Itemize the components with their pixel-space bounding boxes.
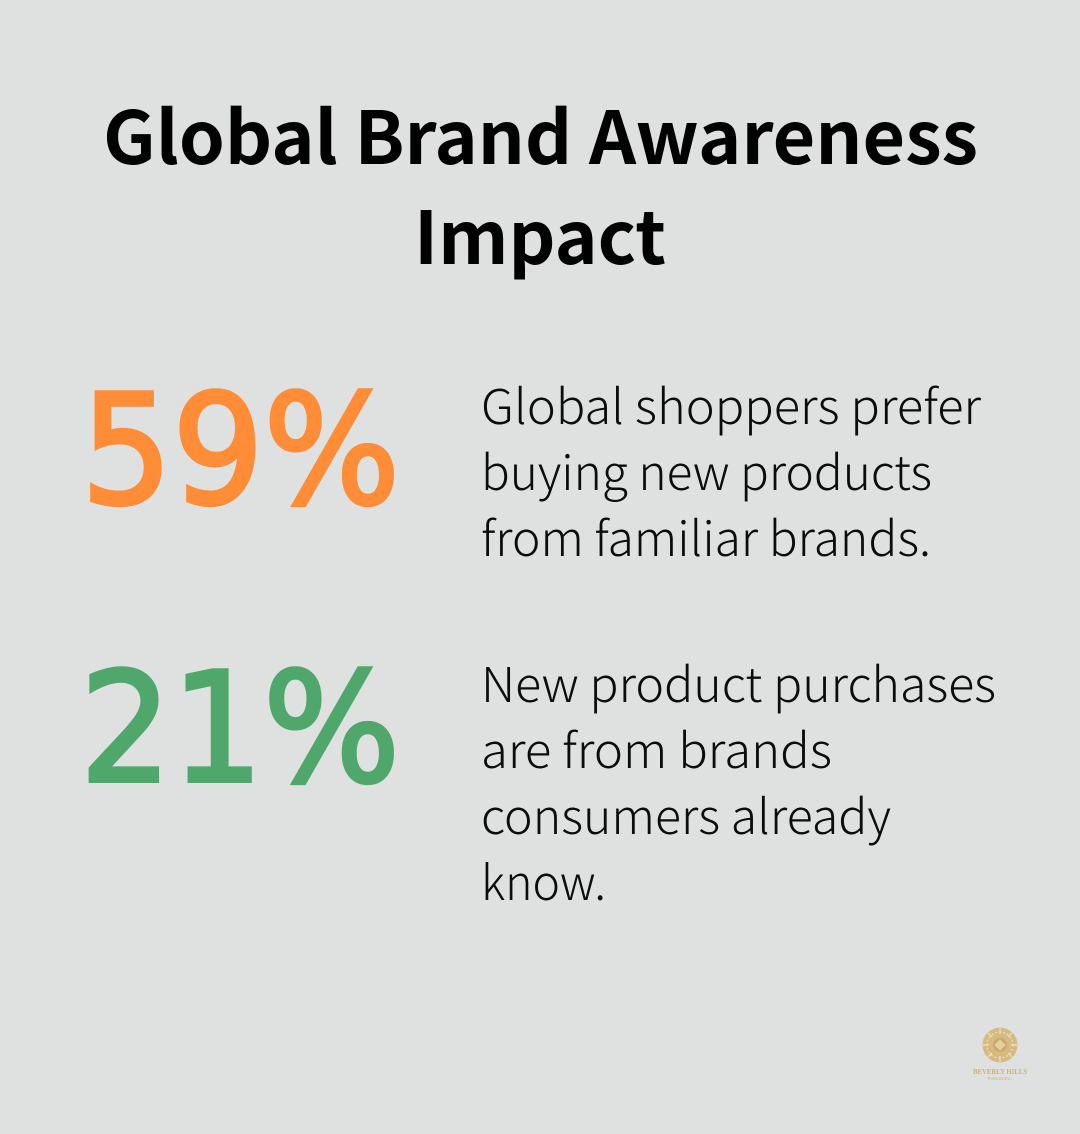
tagline: PUBLISHING	[988, 1076, 1013, 1081]
stat description: familiar brands	[481, 368, 982, 570]
stat value: 59%: 59%	[81, 362, 400, 539]
panel: stat 59%	[81, 362, 982, 570]
stat description: known brands: are from brands	[481, 712, 832, 782]
stat description: known brands: know.	[481, 844, 606, 914]
stat description: familiar brands: from familiar brands.	[481, 500, 931, 570]
stat description: known brands	[481, 646, 996, 914]
stat description: familiar brands: Global shoppers prefer	[481, 368, 982, 438]
stat description: known brands: consumers already	[481, 778, 891, 848]
panel: stat 21%	[80, 640, 996, 914]
wordmark: BEVERLY HILLS	[973, 1067, 1027, 1076]
icon: gold mandala	[982, 1028, 1018, 1062]
title: Global Brand Awareness	[103, 80, 978, 186]
stat description: familiar brands: buying new products	[481, 434, 932, 504]
stat value: 21%: 21%	[80, 640, 400, 817]
title	[103, 80, 978, 286]
title: Impact	[414, 180, 666, 286]
logo: Beverly Hills Publishing	[973, 1028, 1027, 1081]
stat description: known brands: New product purchases	[481, 646, 996, 716]
